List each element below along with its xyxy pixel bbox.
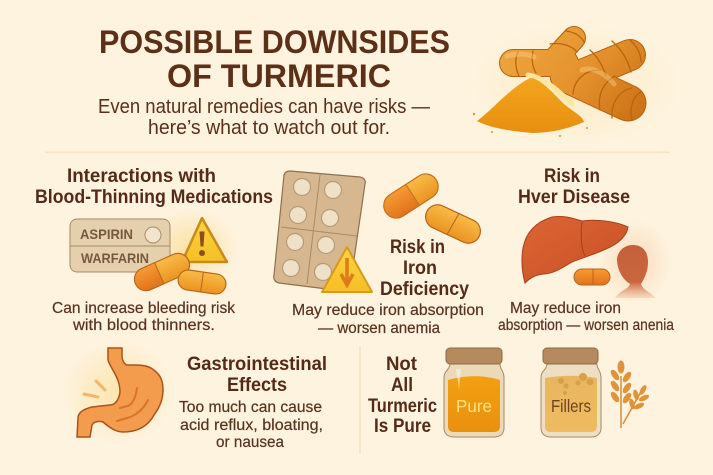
powder pile	[473, 75, 588, 137]
heading	[380, 237, 469, 300]
heading	[368, 354, 437, 437]
heading: Gastrointestinal	[187, 354, 327, 375]
icon: person silhouette	[615, 245, 656, 298]
caption	[292, 302, 484, 337]
title: OF TURMERIC	[167, 58, 391, 94]
panel: liver disease	[498, 166, 674, 334]
caption	[498, 300, 674, 334]
icon: capsule	[422, 201, 484, 247]
heading: Not	[386, 354, 418, 375]
icon: capsule	[379, 169, 443, 223]
caption: May reduce iron	[510, 300, 621, 317]
heading: Blood-Thinning Medications	[35, 187, 273, 208]
medication card: ASPIRIN	[80, 226, 133, 242]
icon: wheat	[609, 360, 650, 428]
icon: irritation marks	[84, 381, 105, 397]
caption	[52, 300, 235, 334]
title	[99, 24, 450, 94]
heading	[518, 166, 630, 208]
caption: May reduce iron absorption	[292, 302, 484, 319]
heading: Effects	[227, 375, 287, 396]
icon: liver	[522, 216, 628, 283]
panel: iron deficiency	[274, 169, 484, 337]
icon: capsule	[574, 269, 610, 285]
icon: turmeric root and powder	[470, 23, 680, 147]
heading: Hver Disease	[518, 187, 630, 208]
caption: Too much can cause	[179, 399, 322, 416]
panel: gastrointestinal effects	[62, 340, 327, 451]
caption	[179, 399, 323, 451]
icon: warning triangle with down arrow	[322, 247, 372, 292]
icon: blister pack	[274, 171, 365, 291]
turmeric root	[507, 31, 641, 120]
icon: pure jar: Pure	[456, 396, 492, 416]
icon: fillers jar	[541, 348, 601, 437]
icon: fillers jar: Fillers	[551, 396, 591, 416]
heading: Deficiency	[380, 279, 469, 300]
heading: Interactions with	[67, 166, 216, 187]
icon: warning triangle	[182, 218, 227, 262]
panel: blood-thinning interactions	[35, 166, 273, 334]
heading: Risk in	[544, 166, 600, 187]
caption: Can increase bleeding risk	[52, 300, 235, 317]
heading: Is Pure	[374, 416, 431, 437]
icon: pure jar	[444, 348, 504, 437]
subtitle	[98, 96, 430, 139]
caption: — worsen anemia	[318, 320, 440, 337]
heading	[187, 354, 327, 396]
caption: or nausea	[216, 434, 284, 451]
caption: absorption — worsen anenia	[498, 317, 674, 334]
heading	[35, 166, 273, 208]
divider	[45, 152, 670, 153]
medication card: WARFARIN	[81, 250, 149, 266]
caption: with blood thinners.	[72, 317, 215, 334]
icon: capsule	[177, 269, 227, 295]
subtitle: here’s what to watch out for.	[148, 117, 390, 139]
heading: Iron	[403, 258, 437, 279]
panel: not all turmeric is pure	[368, 348, 650, 437]
title: POSSIBLE DOWNSIDES	[99, 24, 450, 60]
heading: All	[391, 375, 413, 396]
heading: Turmeric	[368, 396, 437, 417]
subtitle: Even natural remedies can have risks —	[98, 96, 430, 118]
caption: acid reflux, bloating,	[180, 417, 323, 434]
icon: capsule	[131, 250, 193, 294]
medication card	[70, 219, 170, 272]
heading: Risk in	[390, 237, 445, 258]
icon: stomach	[77, 348, 163, 437]
